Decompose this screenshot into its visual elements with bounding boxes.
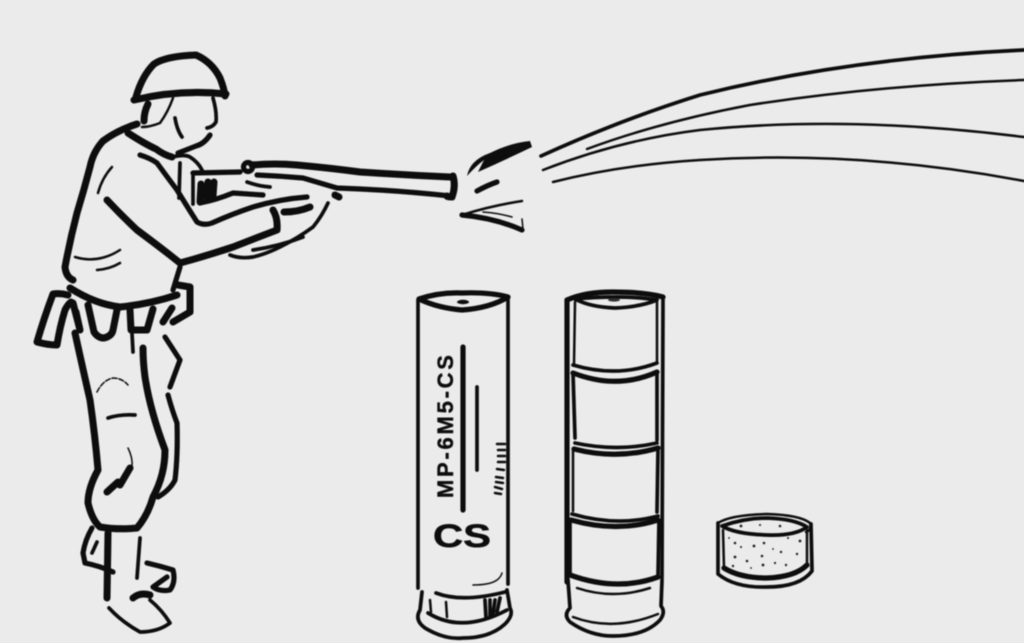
boots (83, 528, 174, 632)
muzzle blast (462, 141, 532, 230)
flash: upper (467, 141, 532, 176)
belt and pouches (37, 285, 190, 345)
flash: middle (477, 182, 497, 191)
top canister (573, 297, 657, 371)
dish of CS powder (718, 514, 812, 587)
third canister (572, 448, 658, 521)
brass base (418, 590, 511, 638)
second canister (573, 372, 657, 448)
cartridge: exterior (418, 293, 511, 638)
head and face (142, 98, 216, 153)
label: CS: CS (433, 518, 491, 554)
soldier figure (37, 55, 454, 632)
helmet (134, 55, 226, 100)
label: MP-6M5-CS: MP-6M5-CS (433, 355, 458, 498)
torso (65, 124, 202, 290)
cartridge: cross-section (566, 292, 663, 636)
barcode ticks (495, 444, 505, 494)
gas streams (541, 50, 1024, 182)
arms (107, 155, 307, 263)
base (566, 580, 663, 636)
powder specks (728, 524, 801, 569)
fourth canister (570, 520, 659, 584)
flash: lower (462, 201, 523, 230)
legs (75, 333, 180, 529)
shotgun (193, 162, 454, 258)
